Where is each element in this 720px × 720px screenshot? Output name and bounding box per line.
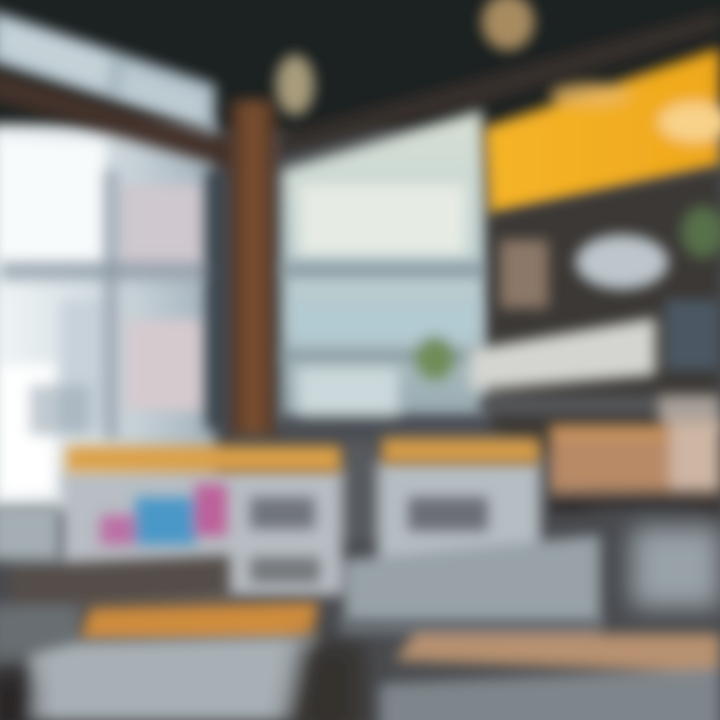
horizontal wooden beam — [0, 68, 235, 170]
dark ceiling — [0, 0, 720, 155]
colourful chart on screen — [100, 484, 227, 545]
dark foreground — [0, 640, 365, 720]
screen dark blocks — [250, 497, 488, 583]
left window — [0, 125, 227, 510]
orange bench top — [80, 602, 318, 640]
upper skylight window — [0, 10, 215, 135]
desk panels — [62, 438, 600, 625]
front right wooden table — [340, 620, 720, 720]
central shelf wall — [282, 110, 492, 435]
orange tops of desk panels — [66, 438, 540, 472]
lower right grey area — [590, 510, 720, 620]
right counter with orange boxes — [550, 420, 720, 513]
wooden post — [230, 100, 276, 435]
orange sign — [485, 48, 720, 215]
right shelves — [470, 170, 720, 520]
lower left shelf — [0, 505, 230, 665]
white front desk — [20, 636, 320, 720]
hanging lamps — [276, 0, 534, 115]
